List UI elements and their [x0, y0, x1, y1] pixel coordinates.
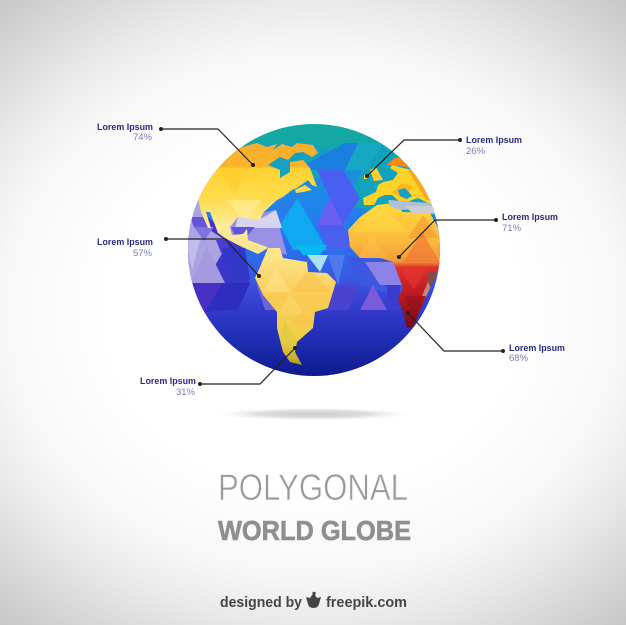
- callout: Lorem Ipsum 68%: [406, 311, 565, 364]
- callout: Lorem Ipsum 74%: 74%: [133, 132, 153, 143]
- icon: freepik crown: [306, 592, 321, 608]
- callout: Lorem Ipsum 68%: 68%: [509, 353, 529, 364]
- callout: Lorem Ipsum 74%: [97, 122, 255, 167]
- title: POLYGONAL: [218, 467, 408, 508]
- callout: Lorem Ipsum 71%: 71%: [502, 223, 522, 234]
- footer credit: freepik.com: [326, 595, 407, 611]
- callout: Lorem Ipsum 57%: Lorem Ipsum: [97, 237, 153, 248]
- callout: Lorem Ipsum 74%: Lorem Ipsum: [97, 122, 153, 133]
- callout: Lorem Ipsum 57%: 57%: [133, 248, 153, 259]
- footer credit: designed by: [220, 595, 302, 611]
- callout: Lorem Ipsum 68%: Lorem Ipsum: [509, 343, 565, 354]
- continents: Americas and Africa: [186, 140, 442, 370]
- globe shadow: [215, 408, 413, 420]
- continent: Caribbean islands: [295, 185, 312, 193]
- title: WORLD GLOBE: [218, 515, 411, 546]
- footer credit: [220, 592, 407, 611]
- continent facets: [186, 168, 442, 345]
- callout: Lorem Ipsum 71%: [397, 212, 558, 259]
- ocean: west lavender: [186, 198, 287, 320]
- callout: Lorem Ipsum 31%: [140, 346, 297, 398]
- callout: Lorem Ipsum 31%: Lorem Ipsum: [140, 376, 196, 387]
- callout: Lorem Ipsum 31%: 31%: [176, 387, 196, 398]
- callout: Lorem Ipsum 26%: [365, 135, 522, 178]
- title: [218, 467, 411, 546]
- callout: Lorem Ipsum 26%: Lorem Ipsum: [466, 135, 522, 146]
- callout: Lorem Ipsum 57%: [97, 237, 261, 278]
- continent: Europe: [363, 158, 435, 214]
- polygonal globe: [186, 124, 445, 376]
- callout: Lorem Ipsum 26%: 26%: [466, 146, 486, 157]
- callout: Lorem Ipsum 71%: Lorem Ipsum: [502, 212, 558, 223]
- ocean: [186, 124, 445, 376]
